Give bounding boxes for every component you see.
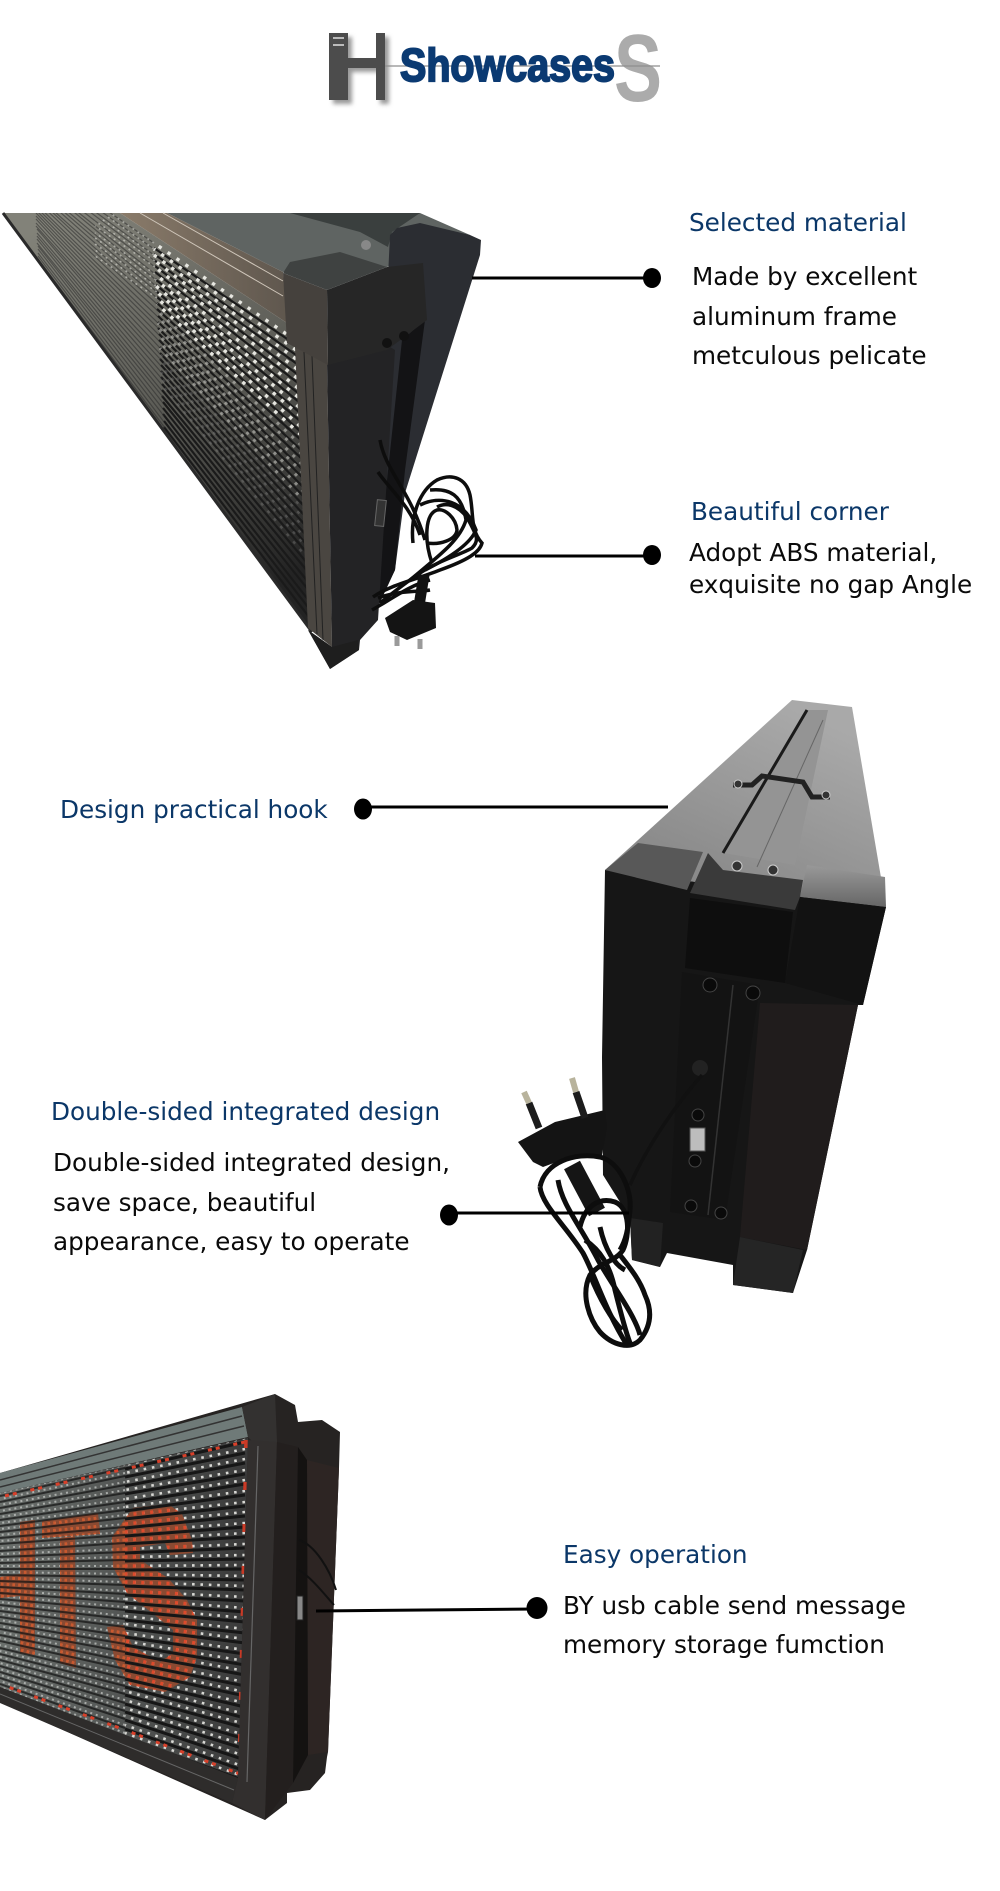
plug cord <box>572 1165 597 1212</box>
top surface <box>167 213 470 272</box>
centre rail strip <box>723 710 828 865</box>
heading: Selected material <box>689 208 907 237</box>
leader line <box>316 1609 536 1611</box>
LED rows <box>36 213 307 616</box>
hook <box>733 776 830 797</box>
panel: sign rear with hook photo <box>518 700 886 1345</box>
front vertical frame <box>232 1440 277 1820</box>
main side panel <box>308 345 395 669</box>
body text line 3: metculous pelicate <box>692 341 927 370</box>
marker dot <box>526 1597 548 1619</box>
panel: sign corner photo <box>3 159 482 669</box>
top corner cap <box>242 1394 277 1446</box>
corner cap left face <box>283 273 328 365</box>
USB port <box>690 1128 705 1151</box>
body text: Double-sided integrated design, <box>53 1148 450 1177</box>
top rail <box>290 213 420 247</box>
heading: Double-sided integrated design <box>51 1097 440 1126</box>
logo tower slots <box>333 38 344 45</box>
body text line 2: exquisite no gap Angle <box>689 570 972 599</box>
right block <box>785 897 886 1005</box>
body text: Adopt ABS material, <box>689 538 937 567</box>
lit letters tint <box>0 1504 197 1692</box>
gap shadow <box>293 1447 308 1783</box>
marker dot <box>354 798 372 820</box>
band highlights <box>140 213 283 296</box>
heading: Easy operation <box>563 1540 748 1569</box>
callout: beautiful corner <box>475 497 972 599</box>
logo wordmark: Showcases <box>400 39 615 91</box>
body text line 2: aluminum frame <box>692 302 897 331</box>
screws <box>382 338 392 348</box>
plate screws <box>685 978 760 1219</box>
rear section <box>340 223 481 640</box>
top band grooves <box>0 1416 244 1487</box>
red border dots right <box>239 1440 246 1776</box>
bottom band groove <box>0 1694 234 1790</box>
top frame band <box>0 1407 248 1493</box>
lower right panel <box>740 1003 858 1250</box>
heading: Beautiful corner <box>691 497 890 526</box>
plug pins <box>529 1092 585 1128</box>
bottom foot <box>308 630 359 669</box>
side USB port <box>297 1596 303 1620</box>
leader line <box>475 554 650 558</box>
rail groove <box>723 710 807 853</box>
leader line <box>472 276 650 280</box>
plate seams <box>708 985 733 1215</box>
rail seam <box>757 720 823 867</box>
side panel <box>265 1442 298 1820</box>
gap shadow <box>372 320 425 620</box>
leader line <box>449 1212 629 1214</box>
coiled cable <box>540 1156 650 1345</box>
plug pin tips <box>524 1078 576 1103</box>
cable from grommet <box>630 1075 702 1185</box>
logo shadow <box>333 37 389 104</box>
plug body <box>518 1110 607 1167</box>
front vertical frame <box>295 347 332 647</box>
power plug <box>385 600 436 640</box>
LED rows <box>0 1438 245 1781</box>
callout: design practical hook <box>60 795 668 824</box>
LED face <box>3 213 312 632</box>
body text: BY usb cable send message <box>563 1591 906 1620</box>
right foot <box>733 1237 803 1293</box>
body text: Made by excellent <box>692 262 918 291</box>
frame highlight <box>247 1446 258 1782</box>
lit letter dots <box>0 1508 196 1692</box>
upper frame band <box>120 213 287 323</box>
callout: easy operation <box>316 1540 906 1659</box>
frame grooves <box>304 352 323 640</box>
centre top cap <box>690 853 803 910</box>
heading: Design practical hook <box>60 795 328 824</box>
callout: double-sided integrated design <box>51 1097 629 1256</box>
logo rule <box>385 65 660 67</box>
logo letter H tower <box>329 33 385 100</box>
top surface <box>605 700 886 907</box>
leader line <box>363 806 668 808</box>
LED face <box>0 1438 248 1778</box>
callout: selected material <box>472 208 927 370</box>
body text line 3: appearance, easy to operate <box>53 1227 410 1256</box>
body text line 2: save space, beautiful <box>53 1188 316 1217</box>
left top cap <box>605 843 703 890</box>
body <box>602 870 886 1293</box>
hook screws <box>732 780 830 875</box>
bottom frame band <box>0 1687 238 1803</box>
marker dot <box>440 1204 458 1226</box>
USB port <box>375 500 386 526</box>
power cable <box>372 440 482 610</box>
left foot <box>630 1218 663 1267</box>
right top cap <box>800 865 886 907</box>
cable grommet <box>692 1060 708 1076</box>
rear strip <box>307 1460 339 1755</box>
marker dot <box>643 545 661 565</box>
LED face lower edge <box>3 213 312 632</box>
panel: LED sign lit front photo <box>0 1394 340 1820</box>
corner cap top <box>283 252 387 290</box>
red border dots bottom <box>0 1684 240 1774</box>
corner cap right face <box>327 263 427 365</box>
body text line 2: memory storage fumction <box>563 1630 885 1659</box>
plug pins <box>397 636 420 649</box>
logo: H Showcases S <box>329 15 662 122</box>
plug cord <box>418 575 424 612</box>
logo large grey S: S <box>614 15 662 122</box>
red border dots top <box>0 1442 245 1497</box>
thin cables <box>299 1540 336 1605</box>
centre block <box>685 898 793 983</box>
connector plate <box>670 972 760 1220</box>
outer silhouette <box>0 1394 340 1820</box>
marker dot <box>643 268 661 288</box>
